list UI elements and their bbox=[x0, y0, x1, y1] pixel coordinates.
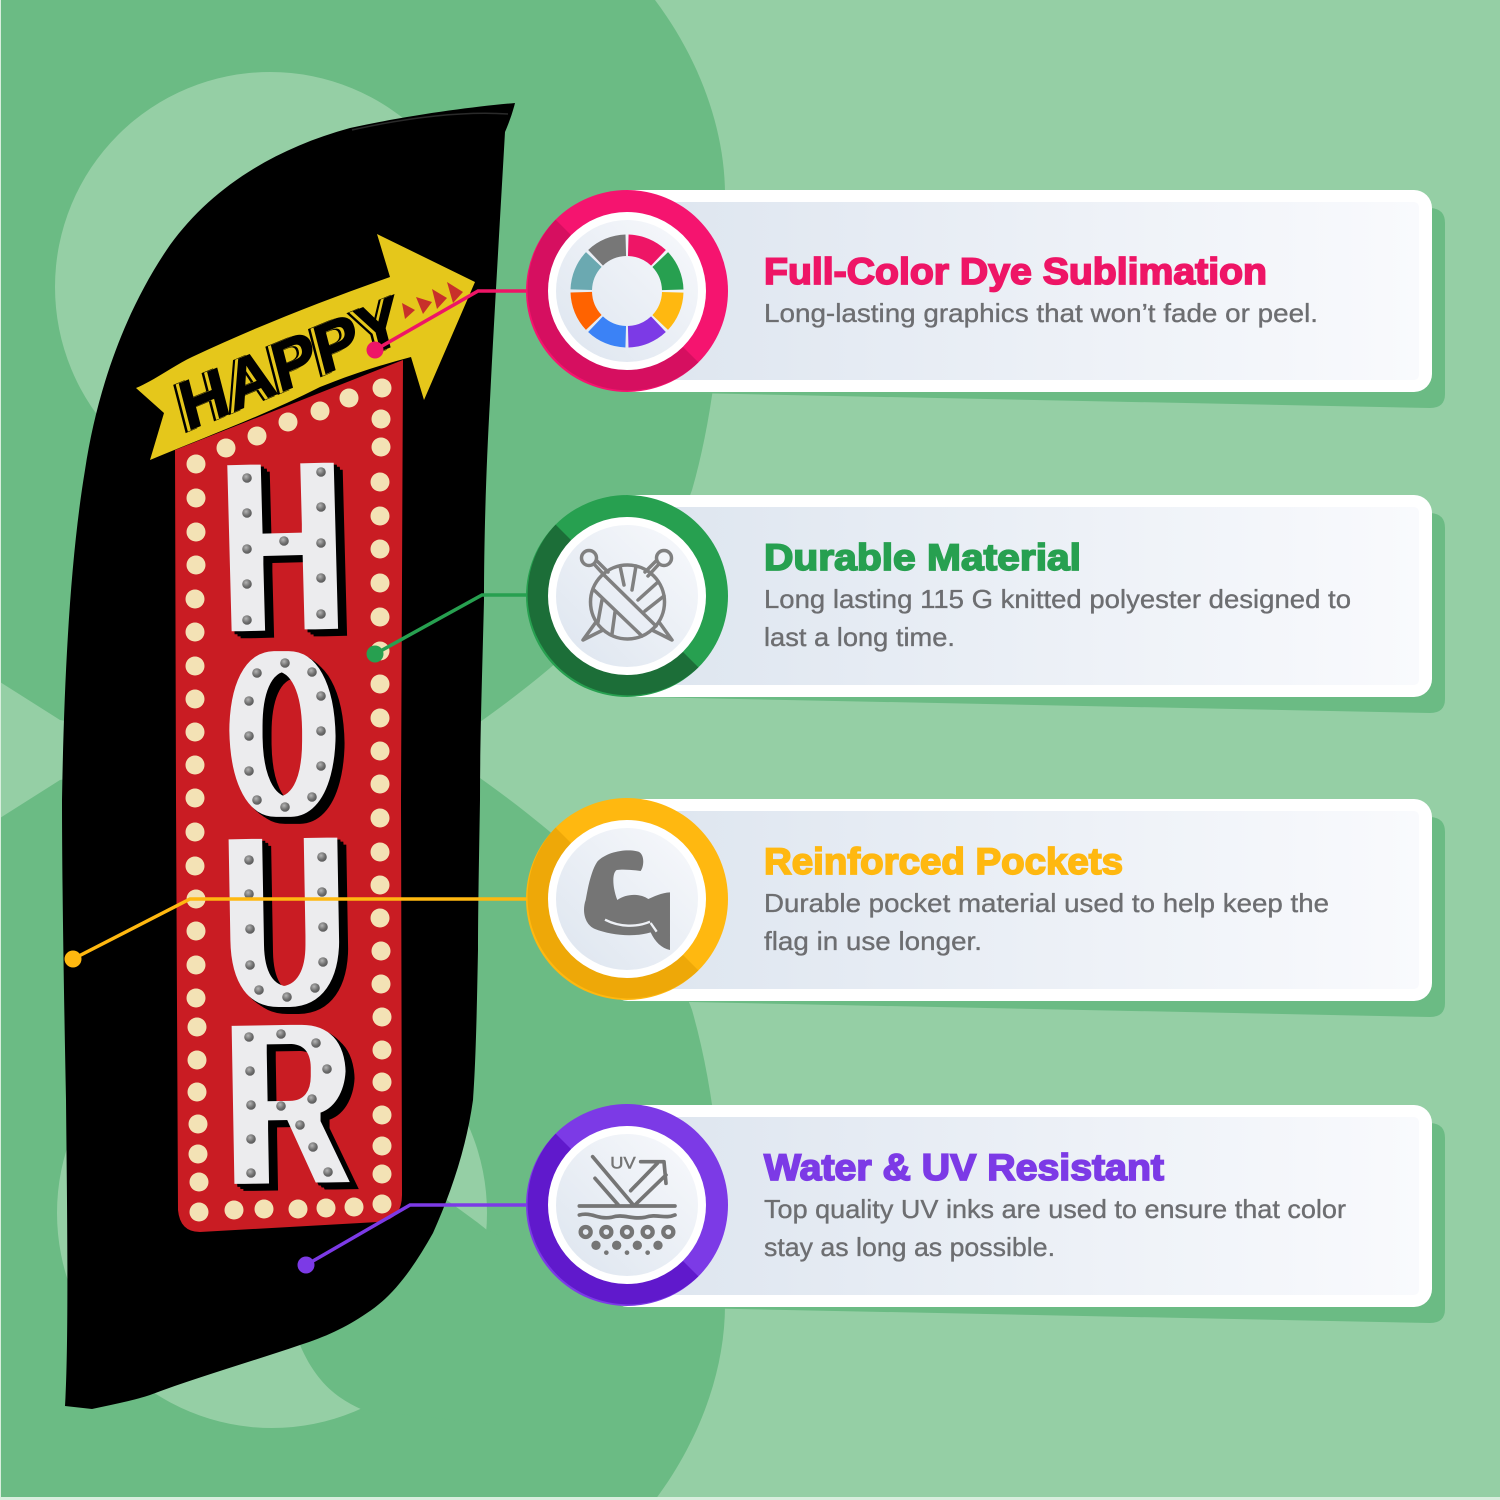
word: HOUR letters bbox=[220, 405, 353, 1240]
word: HOUR letters: O bbox=[228, 595, 337, 872]
word: HOUR letters: R bbox=[224, 968, 353, 1240]
word: HOUR letters: U bbox=[223, 780, 346, 1064]
colour wheel segments bbox=[562, 226, 692, 356]
icon badge: yarn ball bbox=[526, 495, 728, 697]
description bbox=[764, 1194, 1346, 1262]
description: flag in use longer. bbox=[764, 926, 982, 956]
UV symbol: UV bbox=[610, 1154, 637, 1173]
description: stay as long as possible. bbox=[764, 1232, 1055, 1262]
word: HAPPY: HAPPY bbox=[172, 281, 411, 446]
UV symbol bbox=[579, 1154, 675, 1255]
card: Reinforced Pockets bbox=[610, 799, 1445, 1017]
card: Full-Color Dye Sublimation bbox=[610, 190, 1445, 408]
description: Durable pocket material used to help keep the bbox=[764, 888, 1329, 918]
heading: Water & UV Resistant bbox=[764, 1147, 1164, 1188]
connector: yellow bbox=[64, 899, 530, 968]
description: Top quality UV inks are used to ensure that color bbox=[764, 1194, 1346, 1224]
heading: Full-Color Dye Sublimation bbox=[764, 251, 1267, 292]
word: HAPPY: HAPPY bbox=[169, 282, 408, 447]
marquee bulbs bbox=[186, 378, 392, 1222]
icon badge: colour wheel bbox=[526, 190, 728, 392]
red marquee panel bbox=[175, 360, 403, 1232]
word: HOUR letters: H bbox=[220, 405, 346, 690]
yellow arrow bbox=[136, 234, 475, 460]
icon badge: UV resistance bbox=[526, 1104, 728, 1306]
icon badge: flexed arm bbox=[526, 798, 728, 1000]
heading: Durable Material bbox=[764, 537, 1081, 578]
description: Long-lasting graphics that won’t fade or peel. bbox=[764, 298, 1318, 328]
description bbox=[764, 888, 1329, 956]
card: Durable Material bbox=[610, 495, 1445, 713]
connector: pink bbox=[366, 291, 530, 358]
description bbox=[764, 584, 1351, 652]
description: Long lasting 115 G knitted polyester designed to bbox=[764, 584, 1351, 614]
letter rivets bbox=[242, 467, 333, 1178]
card: Water & UV Resistant bbox=[610, 1105, 1445, 1323]
connector: green bbox=[366, 595, 530, 662]
description: last a long time. bbox=[764, 622, 955, 652]
flag bbox=[62, 103, 515, 1409]
yarn and needles bbox=[582, 550, 672, 640]
muscle arm bbox=[584, 850, 670, 950]
connector: purple bbox=[298, 1205, 530, 1274]
flag fabric bbox=[62, 103, 515, 1409]
word: HAPPY: HAPPY bbox=[167, 283, 406, 448]
heading: Reinforced Pockets bbox=[764, 841, 1123, 882]
